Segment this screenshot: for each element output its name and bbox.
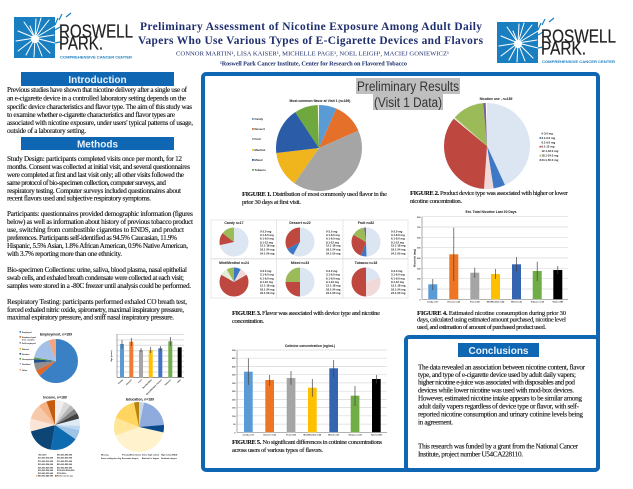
figure 4: nicotine consumption bar chart: Mint/Menthol n=24 [487,300,505,304]
pie: menthol: 3.1-6.0 mg [260,273,274,277]
chart: demographics bar chart: Fruit [137,378,143,384]
chart: education pie: Education, n=189 [126,398,154,402]
pie: mixed: 24.1-50 mg [326,291,341,295]
figure 4: nicotine consumption bar chart: 400 [417,257,421,260]
figure 5: cotinine bar chart: 150 [232,408,236,410]
figure 5: cotinine bar chart: 350 [232,375,236,377]
pie: fruit: 6.1-9.0 mg [391,237,405,241]
figure 3: six pie charts by flavor [211,220,408,325]
text block: study design: recent flavors used and subjective respiratory symptoms. [7,194,151,202]
pie: menthol: Mint/Menthol n=24 [219,261,249,265]
pie: tobacco: 0-3.0 mg [391,269,403,273]
figure 5: cotinine bar chart: Mint/Menthol n=24 [304,434,322,436]
chart: income pie: $30,000-$34,999 [38,469,54,472]
figure 5: cotinine bar chart: Total n=189 [371,434,383,436]
pie: dessert: 0-3.0 mg [326,230,338,234]
caption: figure 2: nicotine concentration. [410,198,462,205]
pie: fruit: 0-3.0 mg [391,230,403,234]
legend: flavors: Mixed [254,158,263,162]
chart: income pie: $40,000-$49,999 [38,475,54,478]
text block: participants: Hispanic, 5.5% Asian, 1.8% African American, 0.9% Native American, [7,242,188,250]
pie: menthol: 6.1-9.0 mg [260,276,274,280]
text block: funding: Institute, project number U54CA228110. [418,450,523,458]
pie: fruit: 18.1-24 mg [391,247,406,251]
panel: introduction [7,72,193,135]
chart: demographics bar chart: Age (years) [110,350,113,361]
title: Vapers Who Use Various Types of E-Cigarette Devices and Flavors [138,35,484,47]
caption: figure 3 [232,310,380,325]
pie: tobacco: 24.1-50 mg [391,291,406,295]
pie: dessert: 12.1-18 mg [326,244,341,248]
caption: figure 4 [417,310,567,331]
text block: introduction: associated with nicotine exposure, under users' typical patterns of usage, [7,119,193,127]
caption: figure 3: FIGURE 3. Flavor was associated with device type and nicotine [232,310,380,317]
text block: introduction: outside of a laboratory setting. [7,127,86,135]
pie: tobacco: 12.1-18 mg [391,284,406,288]
figure 4: nicotine consumption bar chart: Total n=189 [552,300,564,304]
pie: mixed: 12.1-18 mg [326,284,341,288]
figure 4: nicotine consumption bar chart: Mixed n=33 [511,302,523,304]
chart: income pie: $90,000-$99,999 [57,467,73,469]
legend: nicotine: 18.1-24.0 mg [542,154,559,158]
chart: employment pie: time, student [22,338,35,342]
figure 4: nicotine consumption bar chart: 0 [419,299,421,301]
logo: Roswell Park left: COMPREHENSIVE CANCER CENTER [60,54,132,60]
figure 5: cotinine bar chart: 450 [232,357,236,360]
pie: tobacco: 6.1-9.0 mg [391,276,405,280]
figure 5: cotinine bar chart: 250 [232,391,236,393]
heading: preliminary results: (Visit 1 Data) [374,95,442,110]
text block: conclusions: higher nicotine e-juice was associated with disposables and pod [418,378,575,386]
chart: demographics bar chart: Tobacco [165,379,172,386]
text block: conclusions: devices while lower nicotine was used with mod-box devices. [418,386,574,394]
legend: flavors: Dessert [254,127,265,131]
chart: income pie: $35,000-$39,999 [38,473,54,475]
chart: employment pie: Employed [22,332,32,334]
pie: menthol: 9.1-12 mg [260,280,273,284]
heading: preliminary results: Preliminary Results [357,79,459,94]
text block: introduction: to examine whether e-cigarette characteristics and flavor types are [7,111,175,119]
text block: conclusions: reported nicotine consumption and urinary cotinine levels being [418,411,583,419]
text block: introduction: specific device characteristics and flavor type. The aim of this study was [7,103,192,111]
caption: figure 1: FIGURE 1. Distribution of most commonly used flavor in the [242,191,387,198]
text block: bio-specimen collections: samples were stored in a -80C freezer until analysis could be performed. [7,282,191,290]
legend: nicotine: 9.1-12 mg [542,145,555,149]
text block: participants: preferences. Participants self-identified as 94.5% Caucasian, 11.9% [7,234,177,242]
heading: introduction [21,72,174,86]
figure 4: nicotine consumption bar chart [412,210,568,331]
text block: participants: with 3.7% reporting more than one ethnicity. [7,250,122,258]
legend: nicotine: 24.1-50.0 mg [542,158,559,162]
text block: respiratory testing [7,298,187,322]
text block: participants [7,210,193,258]
figure 1: flavor pie chart [242,99,387,206]
heading: conclusions: Conclusions [468,346,529,357]
pie: candy: 24.1-50 mg [260,251,275,255]
chart: income pie: Income, n=189 [43,396,67,400]
text block: participants: below) as well as information about history of previous tobacco product [7,218,193,226]
chart: income pie: $60,000-$69,999 [57,458,73,460]
pie: mixed: 18.1-24 mg [326,287,341,291]
pie: fruit: 24.1-50 mg [391,251,406,255]
figure 4: nicotine consumption bar chart: Dessert n=22 [448,300,461,304]
legend: nicotine: 12.1-18.0 mg [542,149,559,153]
text block: conclusions: in agreement. [418,419,453,427]
legend: flavors: Fruit [254,137,261,141]
chart: employment pie [20,331,72,372]
pie: tobacco [343,259,408,298]
text block: conclusions: However, estimated nicotine intake appears to be similar among [418,395,582,403]
heading: conclusions [458,343,539,357]
pie: candy: Candy n=17 [224,221,244,225]
pie: dessert: 3.1-6.0 mg [326,233,340,237]
chart: demographics bar chart: Dessert [125,378,133,386]
text block: respiratory testing: forced exhaled nitric oxide, spirometry, maximal inspiratory pressure, [7,306,184,314]
logo: Roswell Park right [497,18,616,64]
pie: tobacco: Tobacco n=18 [355,261,377,265]
pie: dessert: 18.1-24 mg [326,247,341,251]
pie: mixed: 3.1-6.0 mg [326,273,340,277]
text block: conclusions [418,363,586,427]
figure 4: nicotine consumption bar chart: Nicotine (mg) [412,249,416,267]
legend: flavors: Tobacco [254,168,266,172]
text block: study design: Study Design: participants completed visits once per month, for 12 [7,155,182,163]
figure 5: cotinine bar chart: Tobacco n=18 [348,434,363,436]
text block: funding [418,442,579,458]
pie: mixed: 6.1-9.0 mg [326,276,340,280]
pie: mixed: Mixed n=33 [291,261,309,265]
text block: bio-specimen collections: Bio-specimen Collections: urine, saliva, blood plasma, nasal epithelial [7,266,187,274]
text block: study design [7,155,190,202]
logo: Roswell Park right: ROSWELL [541,26,616,46]
panel: conclusions [406,337,598,470]
text block: study design: were completed at first and last visit only; all other visits followed the [7,171,184,179]
figure 4: nicotine consumption bar chart: 100 [417,289,421,291]
figure 4: nicotine consumption bar chart: Tobacco n=18 [531,302,545,304]
chart: income pie: $25,000-$29,999 [38,467,54,469]
figure 4: nicotine consumption bar chart: 300 [417,268,421,270]
chart: education pie: Primary/Elementary [122,454,142,456]
figure 5: cotinine bar chart: 200 [232,399,236,401]
text block: bio-specimen collections: swab cells, and exhaled breath condensate were collected at each visit; [7,274,184,282]
chart: income pie: $15,000-$19,999 [38,461,54,463]
title: Preliminary Assessment of Nicotine Exposure Among Adult Daily [140,21,482,33]
legend: nicotine: 6.1-9.0 mg [542,140,555,144]
chart: income pie: $70,000-$79,999 [57,461,73,463]
pie: candy: 12.1-18 mg [260,244,275,248]
pie: menthol: 24.1-50 mg [260,291,275,295]
chart: demographics bar chart [110,334,184,396]
caption: figure 1: prior 30 days at first visit. [242,199,301,206]
chart: education pie: Missing [101,454,109,456]
caption: figure 4: used, and estimation of amount of purchased product used. [417,324,546,331]
pie: fruit: 9.1-12 mg [391,240,404,244]
chart: education pie: Associate degree [122,457,139,460]
chart: employment pie: Employment, n=189 [40,332,72,336]
pie: dessert: 9.1-12 mg [326,240,339,244]
pie: tobacco: 3.1-6.0 mg [391,273,405,277]
legend: nicotine: 3.1-6.0 mg [542,136,555,140]
title [138,21,484,47]
legend: nicotine [540,131,559,162]
chart: income pie: $50,000-$59,999 [57,454,73,456]
chart: income pie: $80,000-$89,999 [57,464,73,466]
pie: mixed: 9.1-12 mg [326,280,339,284]
caption: figure 2 [410,190,569,205]
logo: Roswell Park right: PARK. [541,38,586,58]
chart: income pie: $100,000-$149,999 [57,469,75,472]
caption: figure 2: FIGURE 2. Product device type was associated with higher or lower [410,190,569,197]
logo: Roswell Park right: COMPREHENSIVE CANCER CENTER [542,59,615,64]
text block: conclusions: type, and type of e-cigarette device used by adult daily vapers; [418,371,576,379]
chart: demographics bar chart: Mixed/Multiple Flavors [145,378,163,396]
pie: menthol: 0-3.0 mg [260,269,272,273]
logo: Roswell Park left: PARK. [59,34,103,54]
figure 5: cotinine bar chart: 300 [232,383,236,385]
chart: income pie: Prefer not to say [57,475,74,478]
legend: nicotine: 0-3.0 mg [542,131,553,135]
figure 5: cotinine bar chart: 400 [232,366,236,368]
figure 5: cotinine bar chart [232,344,387,454]
chart: education pie [101,398,178,460]
legend: flavors: Menthol [254,148,265,152]
caption: figure 4: days, calculated using estimated amount purchased, nicotine level [417,316,566,324]
chart: income pie [36,396,75,478]
affiliation: ¹Roswell Park Cancer Institute, Center for Research on Flavored Tobacco [220,60,407,68]
text block: introduction: an e-cigarette device in a controlled laboratory setting depends on the [7,94,186,102]
figure 5: cotinine bar chart: 0 [234,432,236,434]
chart: education pie: Graduate degree [161,457,178,460]
caption: figure 5 [232,439,382,454]
figure 1: flavor pie chart: Most common flavor at Visit 1 (n=189) [290,99,350,103]
figure 4: nicotine consumption bar chart: 200 [417,279,421,281]
pie: candy: 0-3.0 mg [260,230,272,234]
figure 5: cotinine bar chart: Candy n=17 [243,434,255,436]
chart: income pie: $20,000-$24,999 [38,463,54,466]
legend: flavors [252,117,266,172]
text block: bio-specimen collections [7,266,191,290]
chart: income pie: $150,000+ [57,473,67,475]
chart: demographics bar chart: Menthol/Mint [142,378,153,389]
chart: employment pie: Disabled [22,364,31,366]
text block: respiratory testing: maximal expiratory pressure, and sniff nasal inspiratory pressure. [7,314,174,322]
pie: mixed [276,259,343,298]
figure 5: cotinine bar chart: 500 [232,350,236,352]
caption: figure 1 [242,191,387,206]
pie: candy: 6.1-9.0 mg [260,237,274,241]
figure 4: nicotine consumption bar chart: Est. Total Nicotine Last 30 Days [466,210,517,214]
panel: methods [7,137,193,322]
text block: respiratory testing: Respiratory Testing: participants performed exhaled CO breath test, [7,298,187,306]
caption: figure 3: concentration. [232,318,264,325]
heading: methods: Methods [77,140,118,150]
caption: figure 5: FIGURE 5. No significant differences in cotinine concentrations [232,439,382,446]
figure 5: cotinine bar chart: Fruit n=82 [286,434,297,436]
figure 4: nicotine consumption bar chart: 500 [417,248,421,250]
authors: CONNOR MARTIN¹, LISA KAISER¹, MICHELLE PAGE¹, NOEL LEIGH¹, MACIEJ GONIEWICZ¹ [176,50,449,58]
figure 5: cotinine bar chart: Cotinine concentration (ng/mL) [285,344,335,348]
figure 5: cotinine bar chart: 50 [233,424,236,426]
pie: candy: 3.1-6.0 mg [260,233,274,237]
chart: demographics bar chart: Total [176,378,182,384]
chart: employment pie: Self-employed [22,343,36,345]
figure 4: nicotine consumption bar chart: 600 [417,237,421,239]
text block: conclusions: The data revealed an association between nicotine content, flavor [418,363,586,371]
text block: study design: months. Consent was collected at initial visit, and several questionnaires [7,163,190,171]
text block: study design: respiratory testing. Computer surveys included questionnaires about [7,187,181,195]
chart: employment pie: Other [22,369,28,372]
pie: fruit: 3.1-6.0 mg [391,233,405,237]
pie: menthol: 12.1-18 mg [260,284,275,288]
pie: dessert: 6.1-9.0 mg [326,237,340,241]
caption: figure 4: FIGURE 4. Estimated nicotine consumption during prior 30 [417,310,567,317]
legend: flavors: Candy [254,117,263,121]
pie: candy [211,220,276,258]
pie: dessert: 24.1-50 mg [326,251,341,255]
pie: tobacco: 18.1-24 mg [391,287,406,291]
pie: menthol: 18.1-24 mg [260,287,275,291]
heading: preliminary results [356,78,460,110]
figure 4: nicotine consumption bar chart: 700 [417,227,421,229]
logo: Roswell Park left: ROSWELL [59,22,133,42]
pie: tobacco: 9.1-12 mg [391,280,404,284]
pie: fruit [343,220,408,258]
chart: education pie: Some college/no deg. [101,458,122,460]
figure 5: cotinine bar chart: 100 [232,416,236,418]
figure 4: nicotine consumption bar chart: 800 [417,217,421,219]
caption: figure 5: across users of various types of flavors. [232,447,323,454]
chart: education pie: Some high school [142,454,160,456]
logo: Roswell Park left [14,13,133,60]
text block: participants: Participants: questionnaires provided demographic information (figures [7,210,193,218]
heading: methods [21,137,174,150]
pie: fruit: Fruit n=82 [358,221,374,225]
pie: dessert: Dessert n=22 [289,221,311,225]
figure 5: cotinine bar chart: Dessert n=22 [263,434,277,436]
chart: income pie: <$10,000 [38,454,47,456]
chart: education pie: Bachelor's degree [142,458,160,460]
figure 4: nicotine consumption bar chart: Candy n=17 [427,302,439,304]
text block: conclusions: adult daily vapers regardless of device type or flavor, with self- [418,402,580,410]
figure 4: nicotine consumption bar chart: Fruit n=82 [470,300,480,304]
chart: demographics bar chart: Candy [118,379,124,385]
text block: funding: This research was funded by a grant from the National Cancer [418,442,579,450]
pie: fruit: 12.1-18 mg [391,244,406,248]
chart: education pie: High school/GED [161,454,178,456]
pie: mixed: 0-3.0 mg [326,269,338,273]
pie: candy: 18.1-24 mg [260,247,275,251]
chart: income pie: $10,000-$14,999 [38,457,54,460]
pie: menthol [211,259,276,298]
chart: employment pie: Retired [22,348,30,351]
chart: employment pie: Employed part [22,336,36,339]
figure 2: nicotine pie chart [410,97,569,205]
figure 2: nicotine pie chart: Nicotine use , n=189 [480,97,512,101]
text block: introduction [7,86,193,135]
text block: study design: same protocol of bio-specimen collection, computer surveys, and [7,179,166,187]
chart: employment pie: Unemployed [22,359,35,361]
text block: participants: use, switching from combustible cigarettes to ENDS, and product [7,226,184,234]
chart: employment pie: Student [22,353,30,356]
figure 5: cotinine bar chart: Mixed n=33 [328,434,340,436]
heading: introduction: Introduction [68,75,127,86]
pie: candy: 9.1-12 mg [260,240,273,244]
pie: dessert [276,220,343,258]
panel: preliminary results [203,74,598,470]
text block: introduction: Previous studies have shown that nicotine delivery after a single use of [7,86,188,94]
